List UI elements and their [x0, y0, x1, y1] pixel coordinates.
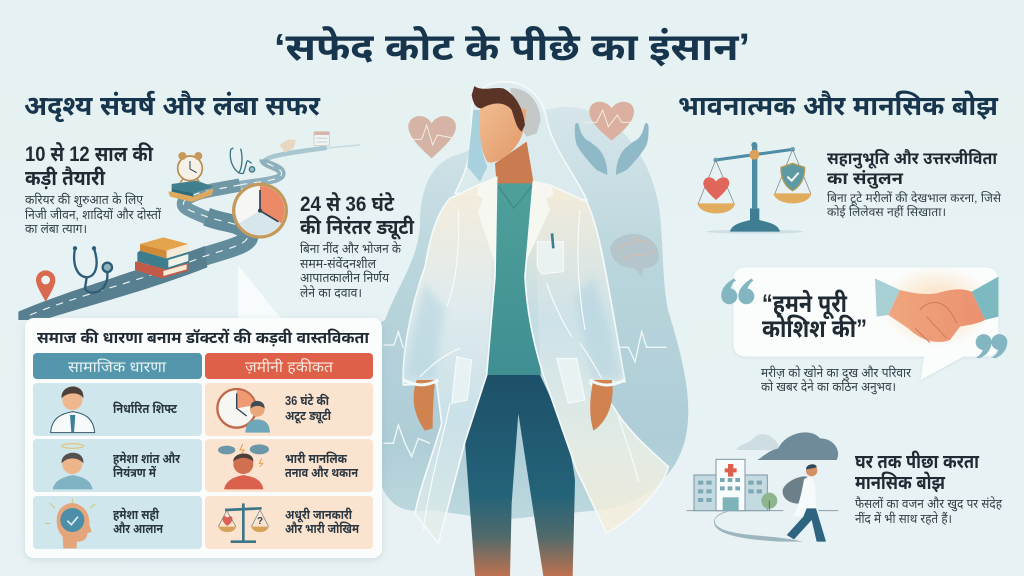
sleeve shade right [575, 277, 622, 378]
text block: empathy balance [827, 150, 1002, 219]
row text: अटूट ड्यूटी [285, 408, 331, 424]
hospital [694, 459, 777, 511]
text block: 10-12 years: करियर की शुरुआत के लिए [25, 192, 144, 208]
cuffs [403, 379, 624, 385]
text block: 10-12 years: कड़ी तैयारी [25, 166, 106, 190]
text block: 24-36 hours: बिना नींद और भोजन के [300, 241, 401, 256]
hand left [414, 380, 435, 431]
quote text: मरीज़ को खोने का दुख और परिवार [761, 365, 912, 381]
icon: shoes [279, 139, 296, 153]
coat left [403, 177, 497, 543]
panel title: समाज की धारणा बनाम डॉक्टरों की कड़वी वास्तविकता [37, 328, 369, 347]
text block: 10-12 years: का लंबा त्याग। [25, 222, 87, 236]
row text [113, 393, 360, 536]
face [479, 103, 527, 163]
sleeve shade left [406, 283, 445, 378]
icon: stethoscope large [74, 247, 112, 293]
column header: perception [33, 353, 202, 379]
coat seams [420, 210, 638, 530]
text block: 10-12 years: निजी जीवन, शादियों और दोस्तों [25, 207, 162, 222]
text block: 24-36 hours: लेने का दवाव। [300, 285, 362, 300]
text block: 24-36 hours: आपातकालीन निर्णय [300, 270, 390, 285]
icon: scales with question: ? [257, 516, 263, 527]
neck [495, 142, 534, 185]
heart [703, 177, 729, 200]
icon: stressed person [218, 444, 269, 489]
row text: 36 घंटे की [285, 393, 329, 408]
quote text: को खबर देने का कठिन अनुभव। [761, 379, 896, 395]
icon: closing quote marks [976, 334, 1007, 358]
icon: map pin [36, 270, 55, 302]
left section heading: अदृश्य संघर्ष और लंबा सफर [24, 90, 321, 123]
column header: perception: सामाजिक धारणा [68, 358, 167, 376]
row text: अधूरी जानकारी [285, 507, 352, 523]
coat pockets [452, 242, 585, 403]
text block: empathy balance: बिना टूटे मरीलों की देखभाल करना, जिसे [827, 190, 1002, 206]
icon: alarm clock [178, 152, 202, 183]
pulse lines [383, 332, 667, 457]
handshake glow [880, 265, 993, 348]
text block: 24-36 hours [300, 192, 415, 300]
icon: scales with question [218, 503, 269, 542]
row text: भारी मानलिक [285, 451, 348, 466]
column header: reality [205, 353, 373, 379]
text block: mental burden: घर तक पीछा करता [855, 451, 979, 473]
text block: mental burden [855, 451, 1002, 526]
text block: 10-12 years [25, 142, 162, 236]
text block: mental burden: मानसिक बोझ [855, 472, 945, 494]
hospital and walking doctor illustration [687, 432, 838, 542]
row text: और भारी जोखिम [285, 521, 360, 536]
road [18, 145, 360, 320]
shield [781, 163, 805, 191]
row text: हमेशा शांत और [113, 451, 180, 466]
text block: mental burden: फैसलों का वजन और खुद पर संदेह [855, 496, 1002, 512]
quote text: कोशिश की” [762, 314, 867, 343]
row text: हमेशा सही [113, 507, 159, 522]
hood inner blue [467, 110, 487, 182]
quote bubble [721, 265, 1007, 380]
ground line [687, 509, 838, 512]
icon: opening quote marks [721, 278, 754, 304]
hood [455, 82, 587, 200]
right section heading: भावनात्मक और मानसिक बोझ [678, 91, 999, 121]
road illustration [18, 132, 360, 320]
text block: 24-36 hours: की निरंतर ड्यूटी [300, 215, 415, 240]
icon: big wall clock [232, 183, 288, 239]
text block: 24-36 hours: 24 से 36 घंटे [300, 192, 395, 216]
text block: mental burden: नींद में भी साथ रहते हैं। [855, 511, 952, 526]
icon: brain head [45, 498, 95, 548]
text block: empathy balance: कोई लिलेवस नहीं सिखाता। [827, 204, 946, 219]
text block: 10-12 years: 10 से 12 साल की [25, 142, 154, 166]
icon: stethoscope small [230, 148, 255, 173]
back hair [510, 88, 541, 137]
scrub top [486, 183, 541, 375]
icon: smiling doctor [51, 386, 95, 433]
row text: निर्धारित शिफ्ट [113, 401, 177, 416]
text block: empathy balance: सहानुभूति और उत्तरजीविता [827, 150, 998, 169]
row text: नियंत्रण में [113, 465, 157, 480]
text block: 24-36 hours: समम-संवेंदनशील [300, 256, 377, 271]
walking doctor [783, 464, 826, 542]
text block: empathy balance: का संतुलन [827, 170, 904, 189]
coat right [525, 182, 668, 533]
legs [465, 375, 575, 576]
row backgrounds [33, 383, 373, 549]
quote text [761, 289, 912, 395]
icon: clock with person [217, 389, 270, 433]
quote text: “हमने पूरी [762, 289, 848, 320]
hair [472, 86, 525, 132]
icon: halo person [53, 444, 93, 489]
icon: balance scale [697, 142, 811, 234]
icon: brain [610, 234, 659, 277]
road [714, 512, 803, 542]
icon: handshake [875, 277, 998, 343]
row text: तनाव और थकान [285, 465, 358, 480]
icon: book stack large [135, 237, 189, 278]
coat lapels [477, 177, 497, 263]
icon: book stack small [168, 181, 213, 202]
title: ‘सफेद कोट के पीछे का इंसान’ [274, 25, 750, 69]
icon: heart and hands [575, 102, 649, 175]
doctor figure [383, 82, 668, 576]
comparison panel [25, 318, 382, 558]
hand right [590, 380, 613, 431]
clouds [736, 432, 838, 460]
callout pointer of comparison panel [238, 265, 284, 322]
icon: calendar [314, 132, 329, 146]
row text: और आलान [113, 521, 163, 536]
background blob behind doctor [380, 107, 688, 520]
column header: reality: ज़मीनी हकीकत [245, 358, 334, 376]
icon: heart pulse left [404, 116, 460, 158]
